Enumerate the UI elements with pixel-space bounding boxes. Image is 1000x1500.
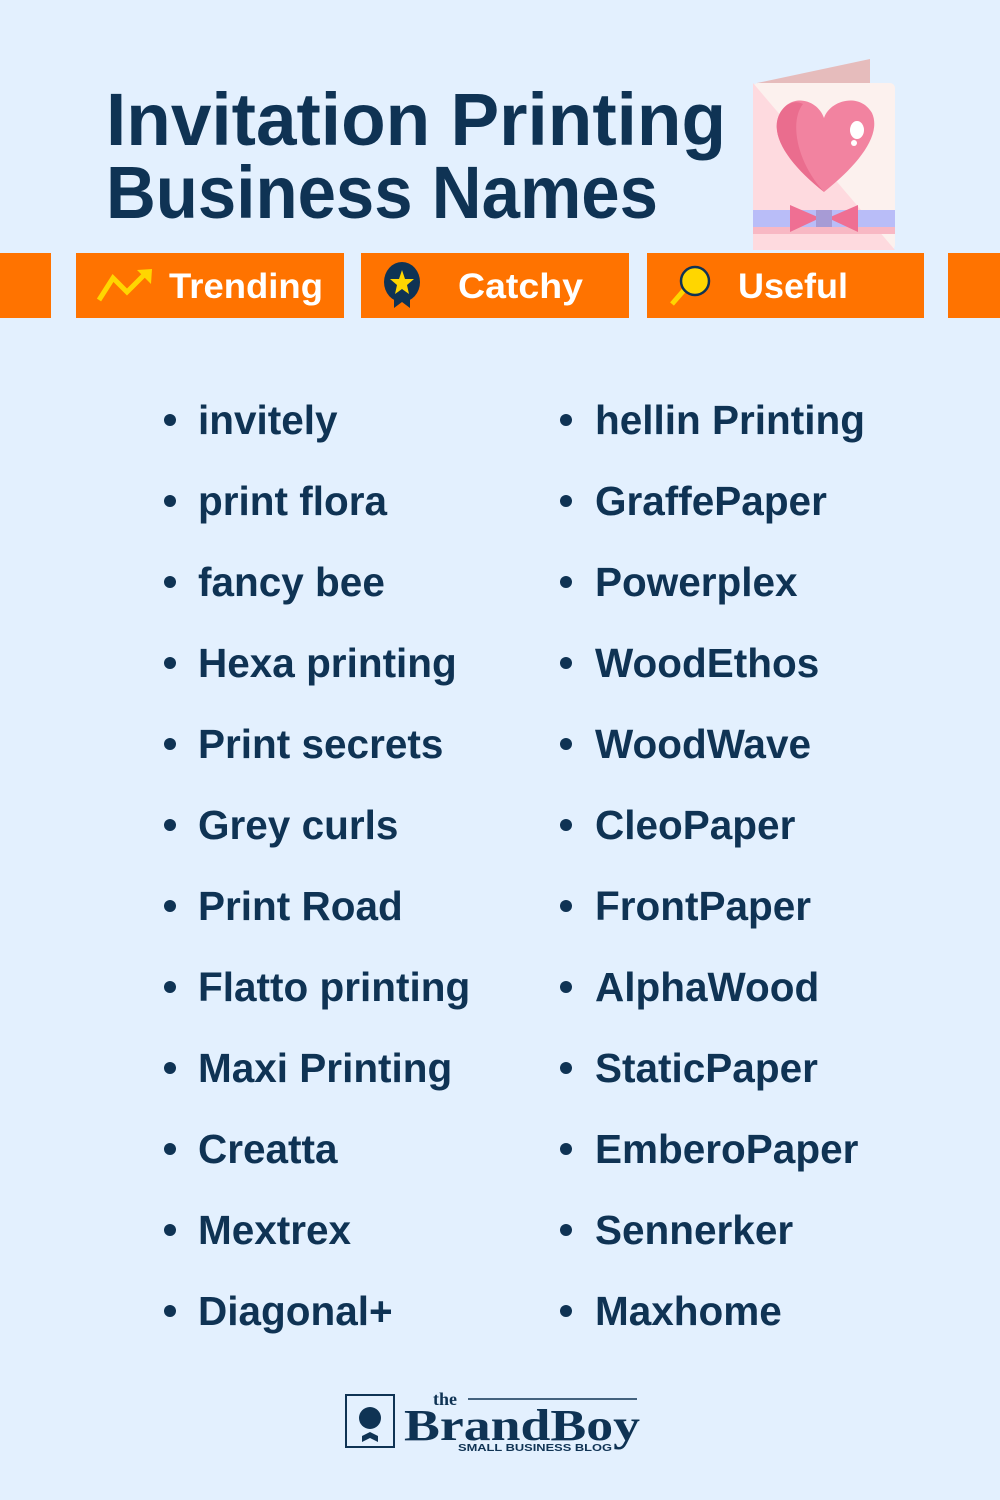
list: left column: Creatta xyxy=(198,1126,338,1172)
list: left column: Print secrets xyxy=(198,721,443,767)
list: left column: invitely xyxy=(198,397,338,443)
tab: Trending: Trending xyxy=(169,267,323,306)
tab bar xyxy=(0,253,1000,318)
icon: invitation card with heart xyxy=(753,59,895,250)
list: right column: Powerplex xyxy=(595,559,798,605)
list: right column: Sennerker xyxy=(595,1207,793,1253)
list: right column: AlphaWood xyxy=(595,964,819,1010)
list: right column: StaticPaper xyxy=(595,1045,818,1091)
list: left column: print flora xyxy=(198,478,387,524)
title: Business Names xyxy=(106,151,658,234)
list: right column: WoodWave xyxy=(595,721,811,767)
list: right column: hellin Printing xyxy=(595,397,865,443)
list: right column: WoodEthos xyxy=(595,640,819,686)
list: left column xyxy=(164,397,470,1334)
list: left column: Maxi Printing xyxy=(198,1045,452,1091)
list: right column: Maxhome xyxy=(595,1288,782,1334)
list: right column: EmberoPaper xyxy=(595,1126,859,1172)
title: Invitation Printing xyxy=(106,78,726,161)
tab: Catchy xyxy=(361,253,629,318)
logo: theBrandBoy: BrandBoy xyxy=(404,1401,640,1450)
list: right column xyxy=(560,397,865,1334)
tab: Useful: Useful xyxy=(738,267,848,306)
list: left column: Diagonal+ xyxy=(198,1288,393,1334)
tab: Useful xyxy=(647,253,924,318)
list: left column: Print Road xyxy=(198,883,403,929)
tab: Catchy: Catchy xyxy=(458,267,584,306)
list: right column: CleoPaper xyxy=(595,802,796,848)
list: left column: Hexa printing xyxy=(198,640,457,686)
logo: theBrandBoy xyxy=(346,1389,640,1454)
list: left column: Grey curls xyxy=(198,802,398,848)
logo: theBrandBoy: SMALL BUSINESS BLOG xyxy=(458,1443,612,1454)
list: left column: fancy bee xyxy=(198,559,385,605)
list: left column: Flatto printing xyxy=(198,964,470,1010)
logo: theBrandBoy: the xyxy=(433,1389,457,1409)
tab: Trending xyxy=(76,253,344,318)
list: right column: FrontPaper xyxy=(595,883,811,929)
title xyxy=(106,78,726,234)
list: left column: Mextrex xyxy=(198,1207,352,1253)
list: right column: GraffePaper xyxy=(595,478,827,524)
